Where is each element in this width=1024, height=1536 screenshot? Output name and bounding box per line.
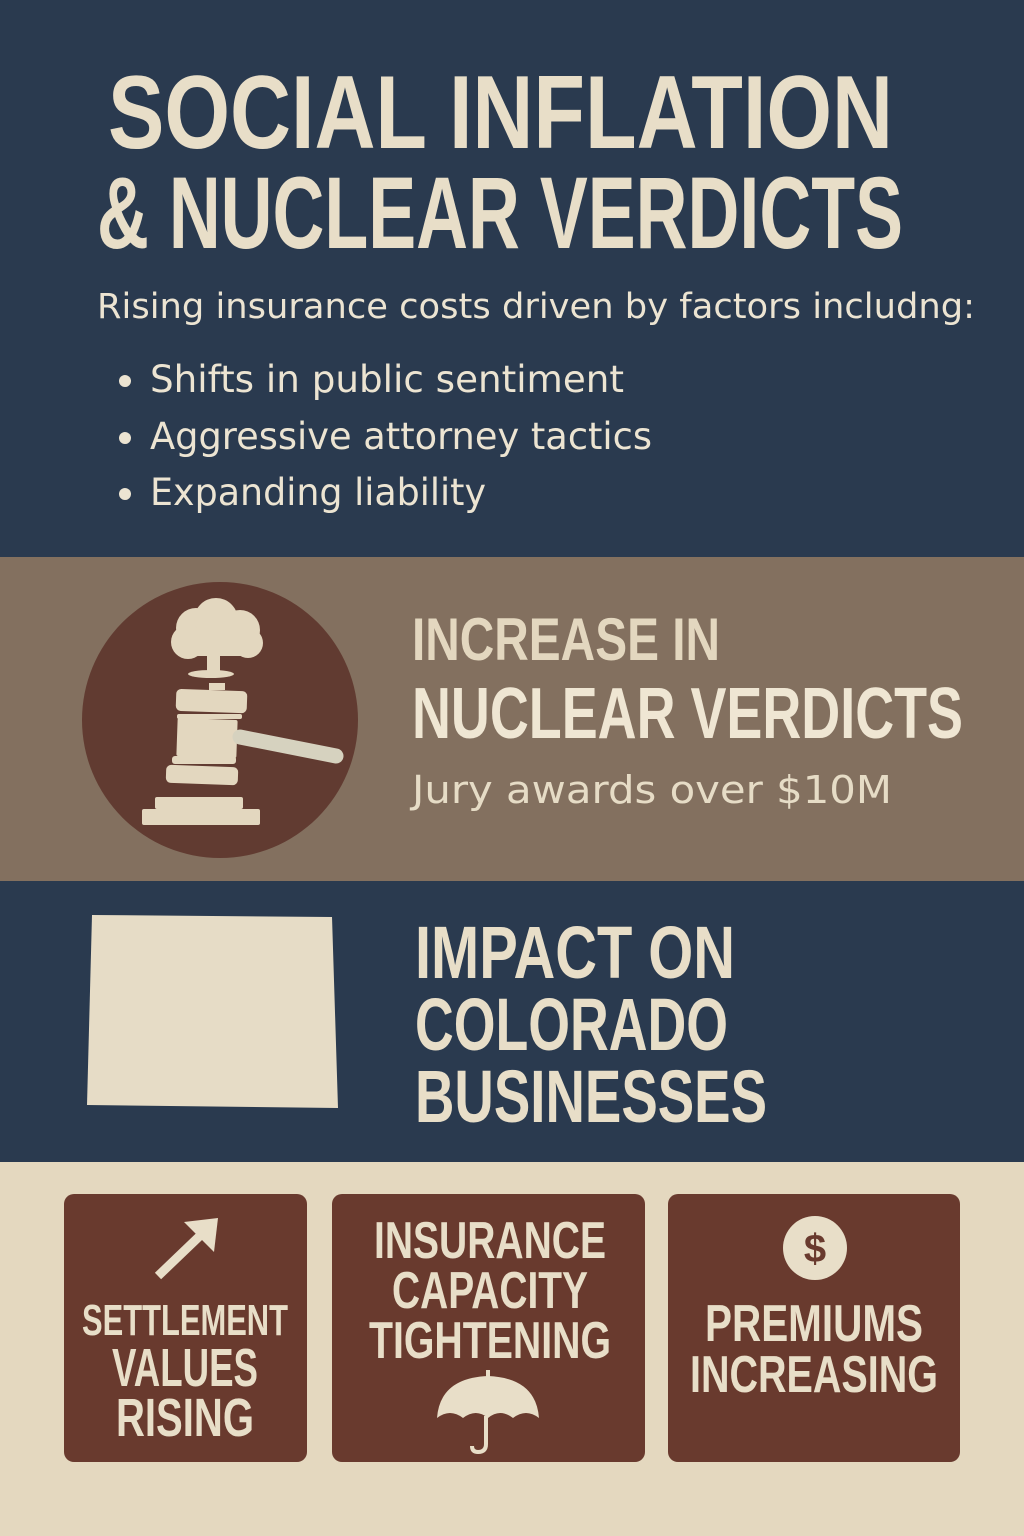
heading: impact on colorado businesses: BUSINESSES xyxy=(415,1055,767,1138)
panel: nuclear verdicts xyxy=(0,557,1024,881)
card: premiums increasing: PREMIUMS xyxy=(705,1295,923,1353)
icon: dollar: $ xyxy=(804,1227,826,1271)
icon: up arrow xyxy=(158,1218,218,1276)
card: premiums increasing xyxy=(668,1194,960,1462)
icon: umbrella xyxy=(437,1370,539,1452)
card: settlement values rising xyxy=(64,1194,307,1462)
bullet list xyxy=(119,358,652,514)
icon: colorado map xyxy=(87,915,338,1108)
heading: increase in nuclear verdicts: INCREASE IN xyxy=(412,606,720,673)
heading: impact on colorado businesses: COLORADO xyxy=(415,983,728,1066)
icon: dollar xyxy=(783,1216,847,1280)
bullet list: Aggressive attorney tactics xyxy=(150,415,652,458)
heading: increase in nuclear verdicts xyxy=(412,606,963,754)
bullet list: Expanding liability xyxy=(150,471,486,514)
card: settlement values rising: VALUES xyxy=(112,1338,258,1398)
subtitle: Rising insurance costs driven by factors includng: xyxy=(97,287,975,327)
panel: impacts xyxy=(0,1162,1024,1536)
card: insurance capacity tightening: TIGHTENING xyxy=(369,1312,611,1370)
card: insurance capacity tightening: CAPACITY xyxy=(392,1262,588,1320)
subtext: Jury awards over $10M xyxy=(410,768,892,812)
icon: gavel with mushroom cloud xyxy=(82,582,358,858)
heading: impact on colorado businesses xyxy=(415,911,767,1138)
title xyxy=(97,55,903,270)
panel: header xyxy=(0,0,1024,557)
card: insurance capacity tightening xyxy=(332,1194,645,1462)
card: settlement values rising: SETTLEMENT xyxy=(82,1296,288,1345)
card: insurance capacity tightening: INSURANCE xyxy=(374,1212,606,1270)
card: premiums increasing: INCREASING xyxy=(690,1346,938,1404)
heading: impact on colorado businesses: IMPACT ON xyxy=(415,911,735,994)
card: settlement values rising: RISING xyxy=(116,1388,254,1448)
bullet list: Shifts in public sentiment xyxy=(150,358,624,401)
panel: colorado xyxy=(0,881,1024,1162)
